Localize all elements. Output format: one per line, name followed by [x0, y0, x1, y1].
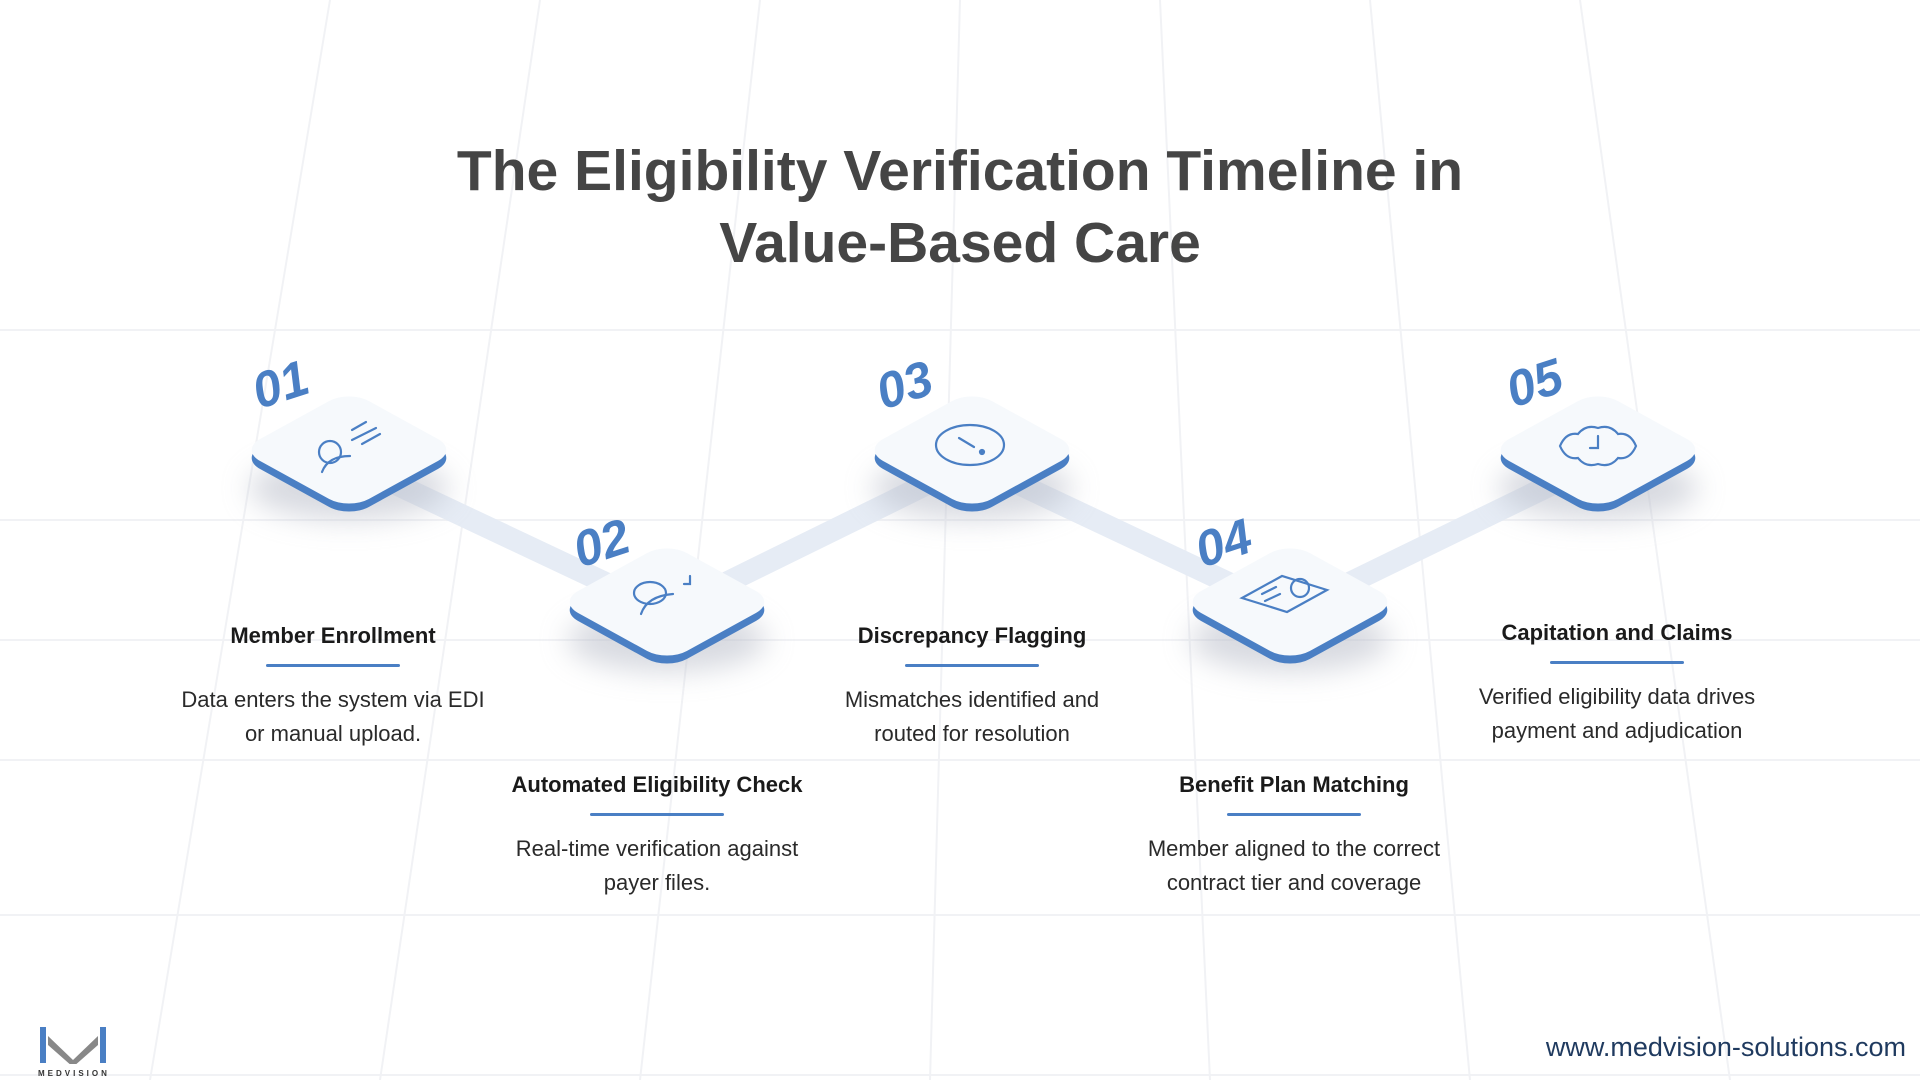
logo: MEDVISION: [38, 1069, 110, 1078]
step 3 tile: [863, 350, 1081, 520]
website url: www.medvision-solutions.com: [1546, 1032, 1906, 1062]
step 4 text: Member aligned to the correct: [1148, 836, 1440, 861]
step 3 text: [845, 623, 1099, 746]
step 1 text: or manual upload.: [245, 721, 421, 746]
step 5 text: payment and adjudication: [1492, 718, 1742, 743]
logo: [38, 1027, 110, 1078]
step 2 text: payer files.: [604, 870, 710, 895]
step 3 text: routed for resolution: [874, 721, 1070, 746]
title: Value-Based Care: [719, 211, 1201, 275]
step 1 text: [181, 623, 485, 746]
title: [457, 139, 1463, 275]
connectors: [349, 462, 1598, 612]
step 4 text: [1148, 772, 1440, 895]
step 4 tile: 04: [1188, 508, 1259, 578]
step 1 text: Member Enrollment: [230, 623, 436, 648]
step 3 text: Mismatches identified and: [845, 687, 1099, 712]
step 4 text: Benefit Plan Matching: [1179, 772, 1409, 797]
title: The Eligibility Verification Timeline in: [457, 139, 1463, 203]
step 1 text: Data enters the system via EDI: [181, 687, 485, 712]
step 5 tile: 05: [1499, 347, 1571, 418]
step 2 tile: [558, 508, 776, 672]
step 5 text: Verified eligibility data drives: [1479, 684, 1755, 709]
step 3 text: Discrepancy Flagging: [858, 623, 1086, 648]
step 5 text: Capitation and Claims: [1501, 620, 1733, 645]
step 2 text: [512, 772, 802, 895]
step 3 tile: 03: [869, 350, 940, 420]
step 4 tile: [1181, 508, 1399, 672]
step 2 text: Real-time verification against: [516, 836, 798, 861]
step 1 tile: [240, 349, 458, 520]
step 1 tile: 01: [245, 349, 316, 420]
step 5 tile: [1489, 347, 1707, 520]
step 4 text: contract tier and coverage: [1167, 870, 1421, 895]
step 2 tile: 02: [566, 508, 637, 578]
step 2 text: Automated Eligibility Check: [512, 772, 802, 797]
step 5 text: [1479, 620, 1755, 743]
